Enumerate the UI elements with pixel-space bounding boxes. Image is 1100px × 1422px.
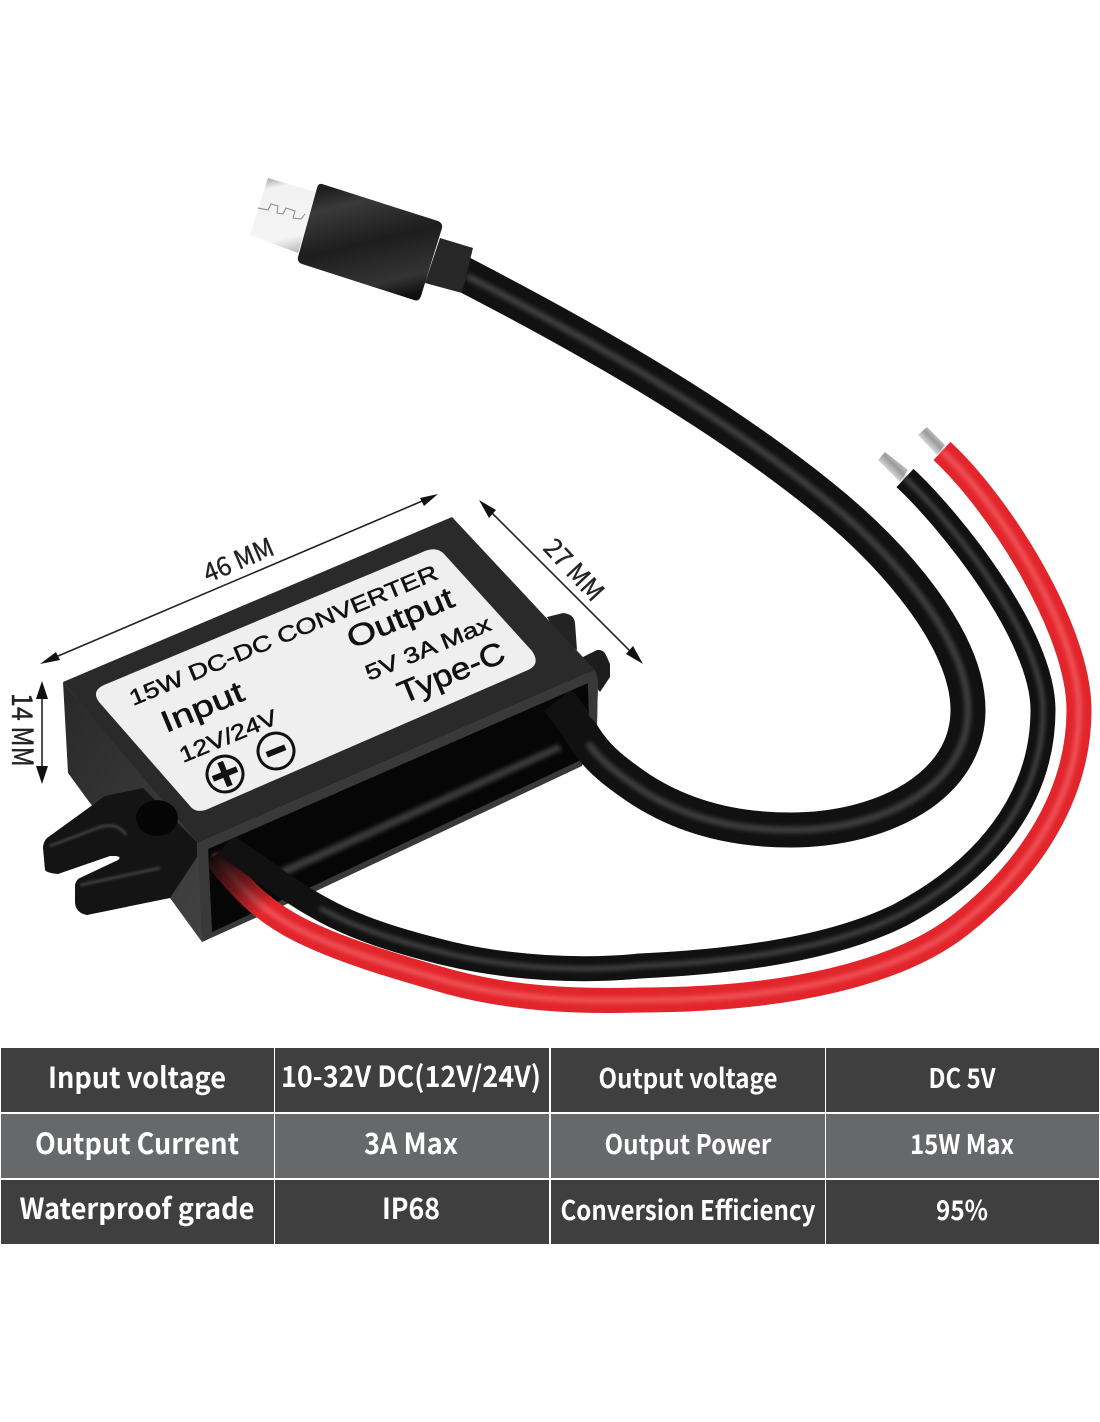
cell: output current value: 3A Max <box>364 1121 458 1163</box>
cell: output power value: 15W Max <box>910 1123 1014 1162</box>
cell: output power: Output Power <box>604 1123 772 1162</box>
type-c output cable <box>452 268 968 830</box>
label background <box>96 549 536 811</box>
cell: conversion efficiency: Conversion Efficiency <box>560 1189 816 1228</box>
cell: efficiency value: 95% <box>936 1189 988 1228</box>
cell: output voltage value: DC 5V <box>928 1057 996 1096</box>
cell: input voltage value: 10-32V DC(12V/24V) <box>281 1054 541 1096</box>
housing frame <box>198 670 598 942</box>
ear ridge highlight <box>50 826 160 885</box>
row 1 background <box>1 1048 1099 1112</box>
metal plug <box>250 178 316 253</box>
strain relief <box>425 238 473 293</box>
product label <box>96 549 536 811</box>
cell: input voltage: Input voltage <box>48 1055 226 1097</box>
mounting ear <box>43 788 197 915</box>
black input wire <box>225 478 1043 969</box>
mounting ear hole <box>136 800 178 836</box>
input voltage text: 12V/24V <box>175 704 281 768</box>
cell: output current: Output Current <box>35 1121 239 1163</box>
housing body <box>63 670 598 942</box>
label title: 15W DC-DC CONVERTER <box>125 560 441 711</box>
housing rim and top face <box>63 517 598 942</box>
usb type-c connector <box>250 178 473 300</box>
dimension: 27 mm: 27 MM <box>536 529 614 609</box>
icon: plus terminal <box>202 751 248 797</box>
red wire metal tip <box>918 427 945 455</box>
input text: Input <box>156 675 250 739</box>
cell: waterproof grade: Waterproof grade <box>20 1186 254 1228</box>
output rating text: 5V 3A Max <box>361 611 495 686</box>
top face <box>63 517 595 843</box>
output text: Output <box>342 581 460 655</box>
red input wire <box>215 451 1079 1000</box>
front channel <box>208 683 589 932</box>
black wire metal tip <box>878 452 908 482</box>
dimension: 14 mm: 14 MM <box>3 693 45 767</box>
type-c text: Type-C <box>392 635 510 710</box>
specifications table <box>1 1048 1099 1244</box>
cell: waterproof value: IP68 <box>382 1186 440 1228</box>
dimension: 46 mm <box>40 494 438 664</box>
channel ledge <box>273 744 562 878</box>
cell: output voltage: Output voltage <box>598 1057 778 1096</box>
row 3 background <box>1 1180 1099 1244</box>
left end face <box>63 682 202 942</box>
dimension: 27 mm <box>479 500 643 664</box>
dimension: 46 mm: 46 MM <box>197 527 279 590</box>
icon: minus terminal <box>253 728 299 774</box>
top rim <box>198 670 598 849</box>
rear mounting tabs <box>547 613 610 692</box>
plug contact trace <box>258 204 305 219</box>
connector housing <box>298 184 442 300</box>
row 2 background <box>1 1114 1099 1178</box>
left rim <box>198 843 212 942</box>
right wall <box>588 680 598 724</box>
